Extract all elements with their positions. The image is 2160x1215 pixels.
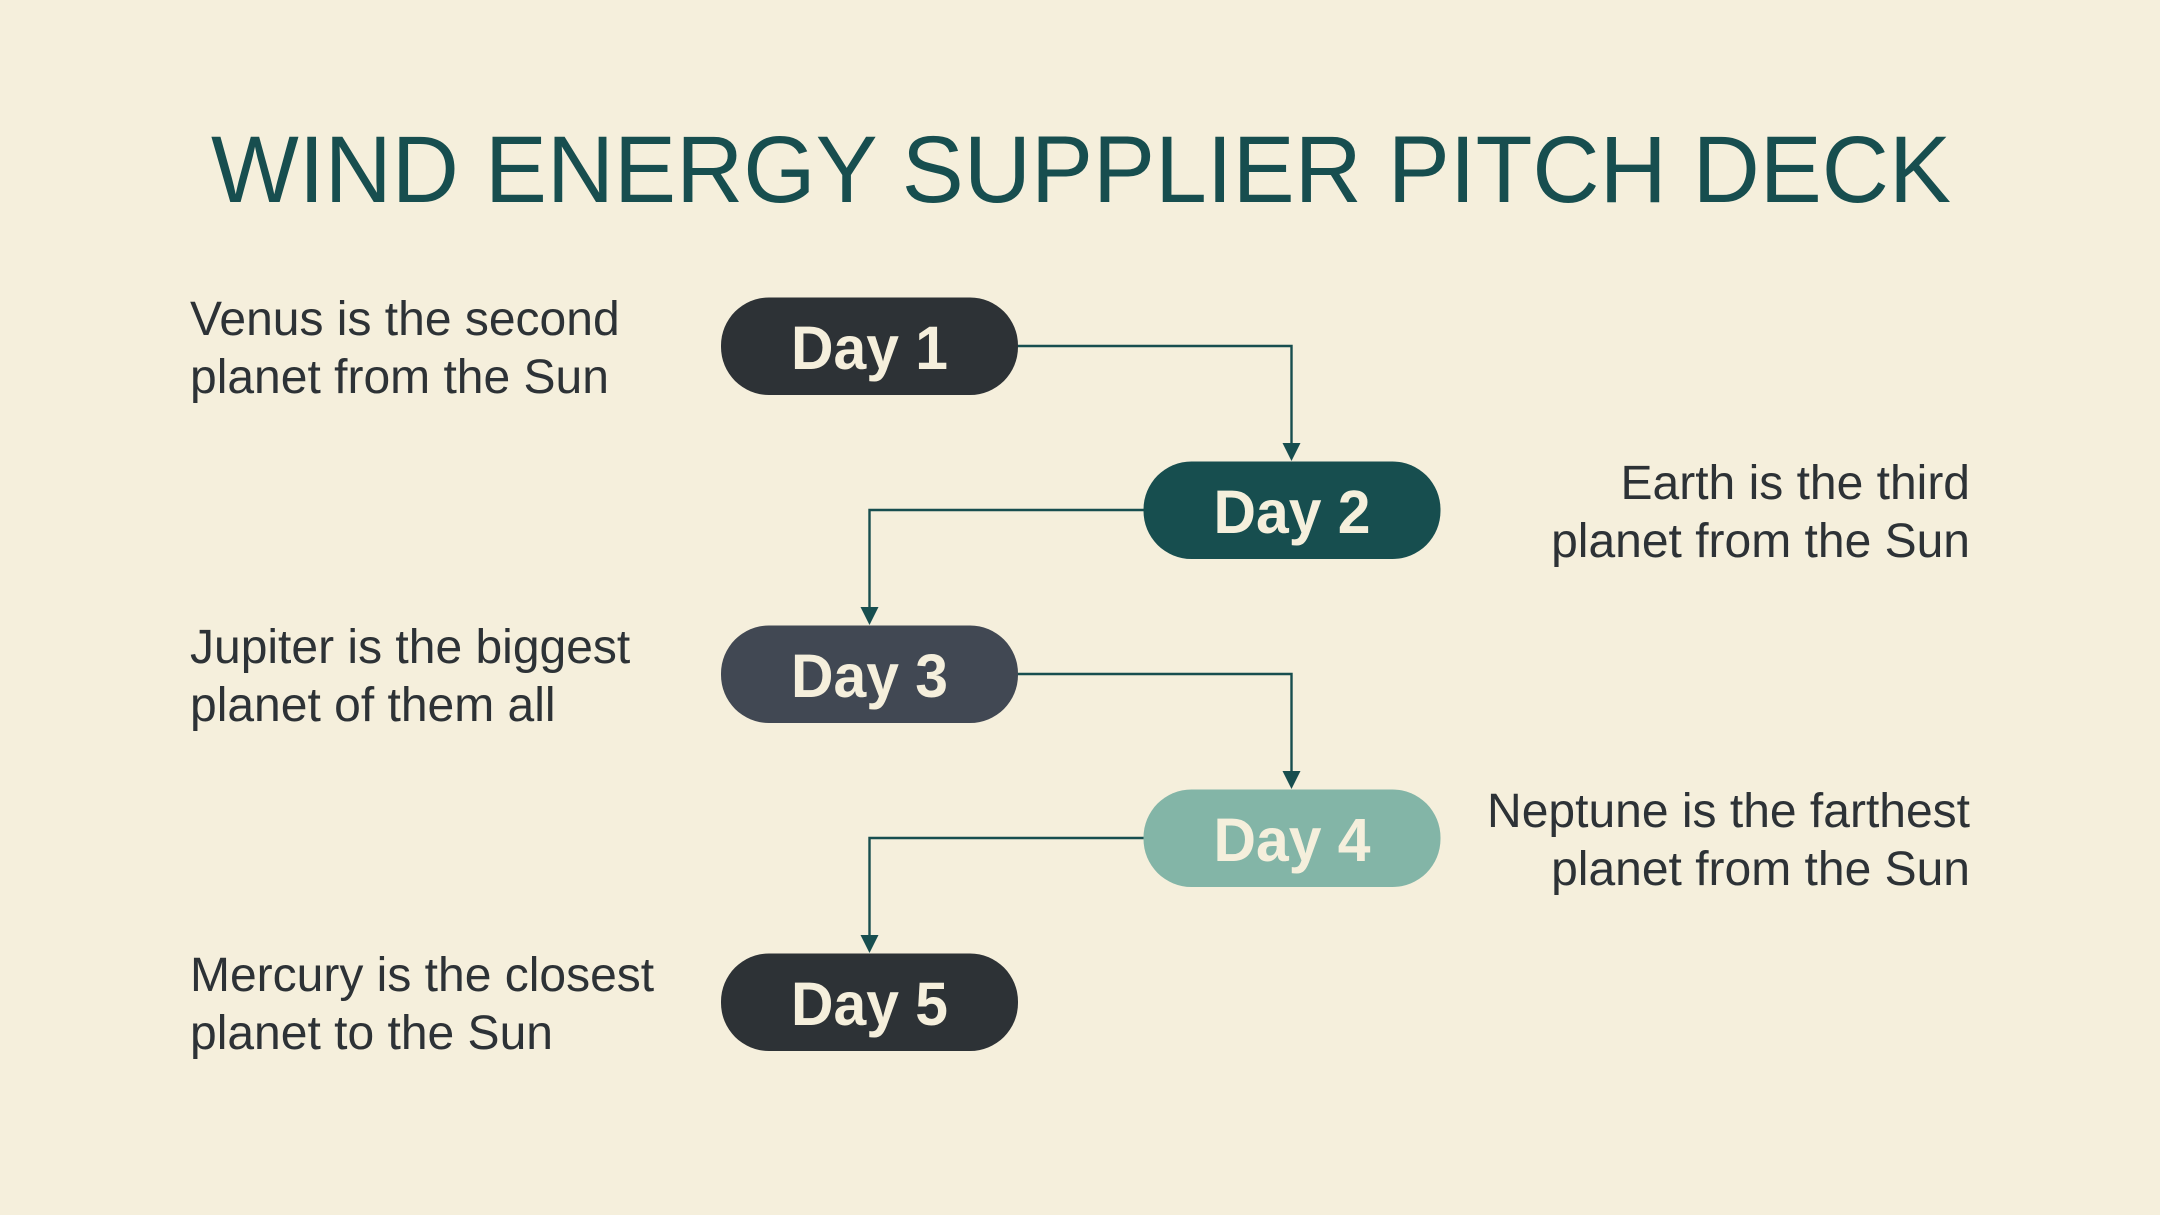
text: mercury: Mercury is the closest (190, 949, 654, 1002)
text: neptune: Neptune is the farthest (1487, 785, 1970, 838)
arrow: day 1 to day 2 (1018, 346, 1300, 461)
text: mercury: planet to the Sun (190, 1007, 553, 1060)
text: neptune: planet from the Sun (1551, 843, 1970, 896)
text: jupiter: Jupiter is the biggest (190, 621, 630, 674)
text: venus: Venus is the second (190, 293, 620, 346)
title: WIND ENERGY SUPPLIER PITCH DECK (211, 117, 1951, 223)
text: earth: Earth is the third (1620, 457, 1970, 510)
arrow: day 3 to day 4 (1018, 674, 1300, 789)
text: venus: planet from the Sun (190, 351, 609, 404)
pill: day 1 (721, 298, 1018, 395)
pill: day 3 (721, 626, 1018, 723)
pill: day 4 (1144, 790, 1440, 887)
arrow: day 2 to day 3 (860, 510, 1144, 625)
pill: day 1: Day 1 (791, 314, 948, 382)
pill: day 5: Day 5 (791, 970, 948, 1038)
text: jupiter: planet of them all (190, 679, 556, 732)
pill: day 3: Day 3 (791, 642, 948, 710)
pill: day 2: Day 2 (1214, 478, 1370, 546)
text: earth: planet from the Sun (1551, 515, 1970, 568)
arrow: day 4 to day 5 (860, 838, 1144, 953)
pill: day 2 (1144, 462, 1440, 559)
pill: day 5 (721, 954, 1018, 1051)
pill: day 4: Day 4 (1214, 806, 1371, 874)
